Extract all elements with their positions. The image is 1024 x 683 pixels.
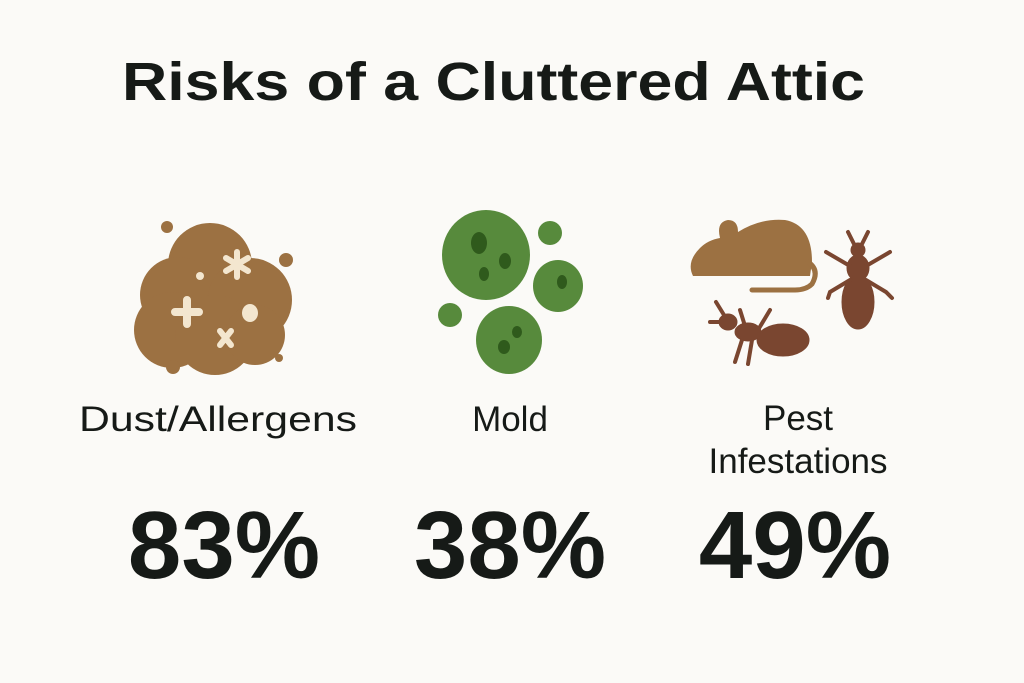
label: pests: Infestations bbox=[708, 442, 888, 481]
icon: mold spores bbox=[438, 210, 583, 374]
label: dust: Dust/Allergens bbox=[79, 400, 357, 439]
label: pests: Pest bbox=[763, 399, 833, 438]
title: Risks of a Cluttered Attic bbox=[122, 52, 865, 112]
icon: ant left bbox=[710, 302, 809, 364]
label: mold: Mold bbox=[472, 400, 548, 439]
icon: dust cloud bbox=[134, 221, 293, 375]
stat: 38%: 38% bbox=[414, 492, 606, 599]
icon: mouse bbox=[691, 220, 815, 290]
icon: pests bbox=[691, 220, 892, 364]
stat: 49%: 49% bbox=[699, 492, 891, 599]
icon: ant right bbox=[826, 232, 892, 329]
stat: 83%: 83% bbox=[128, 492, 320, 599]
